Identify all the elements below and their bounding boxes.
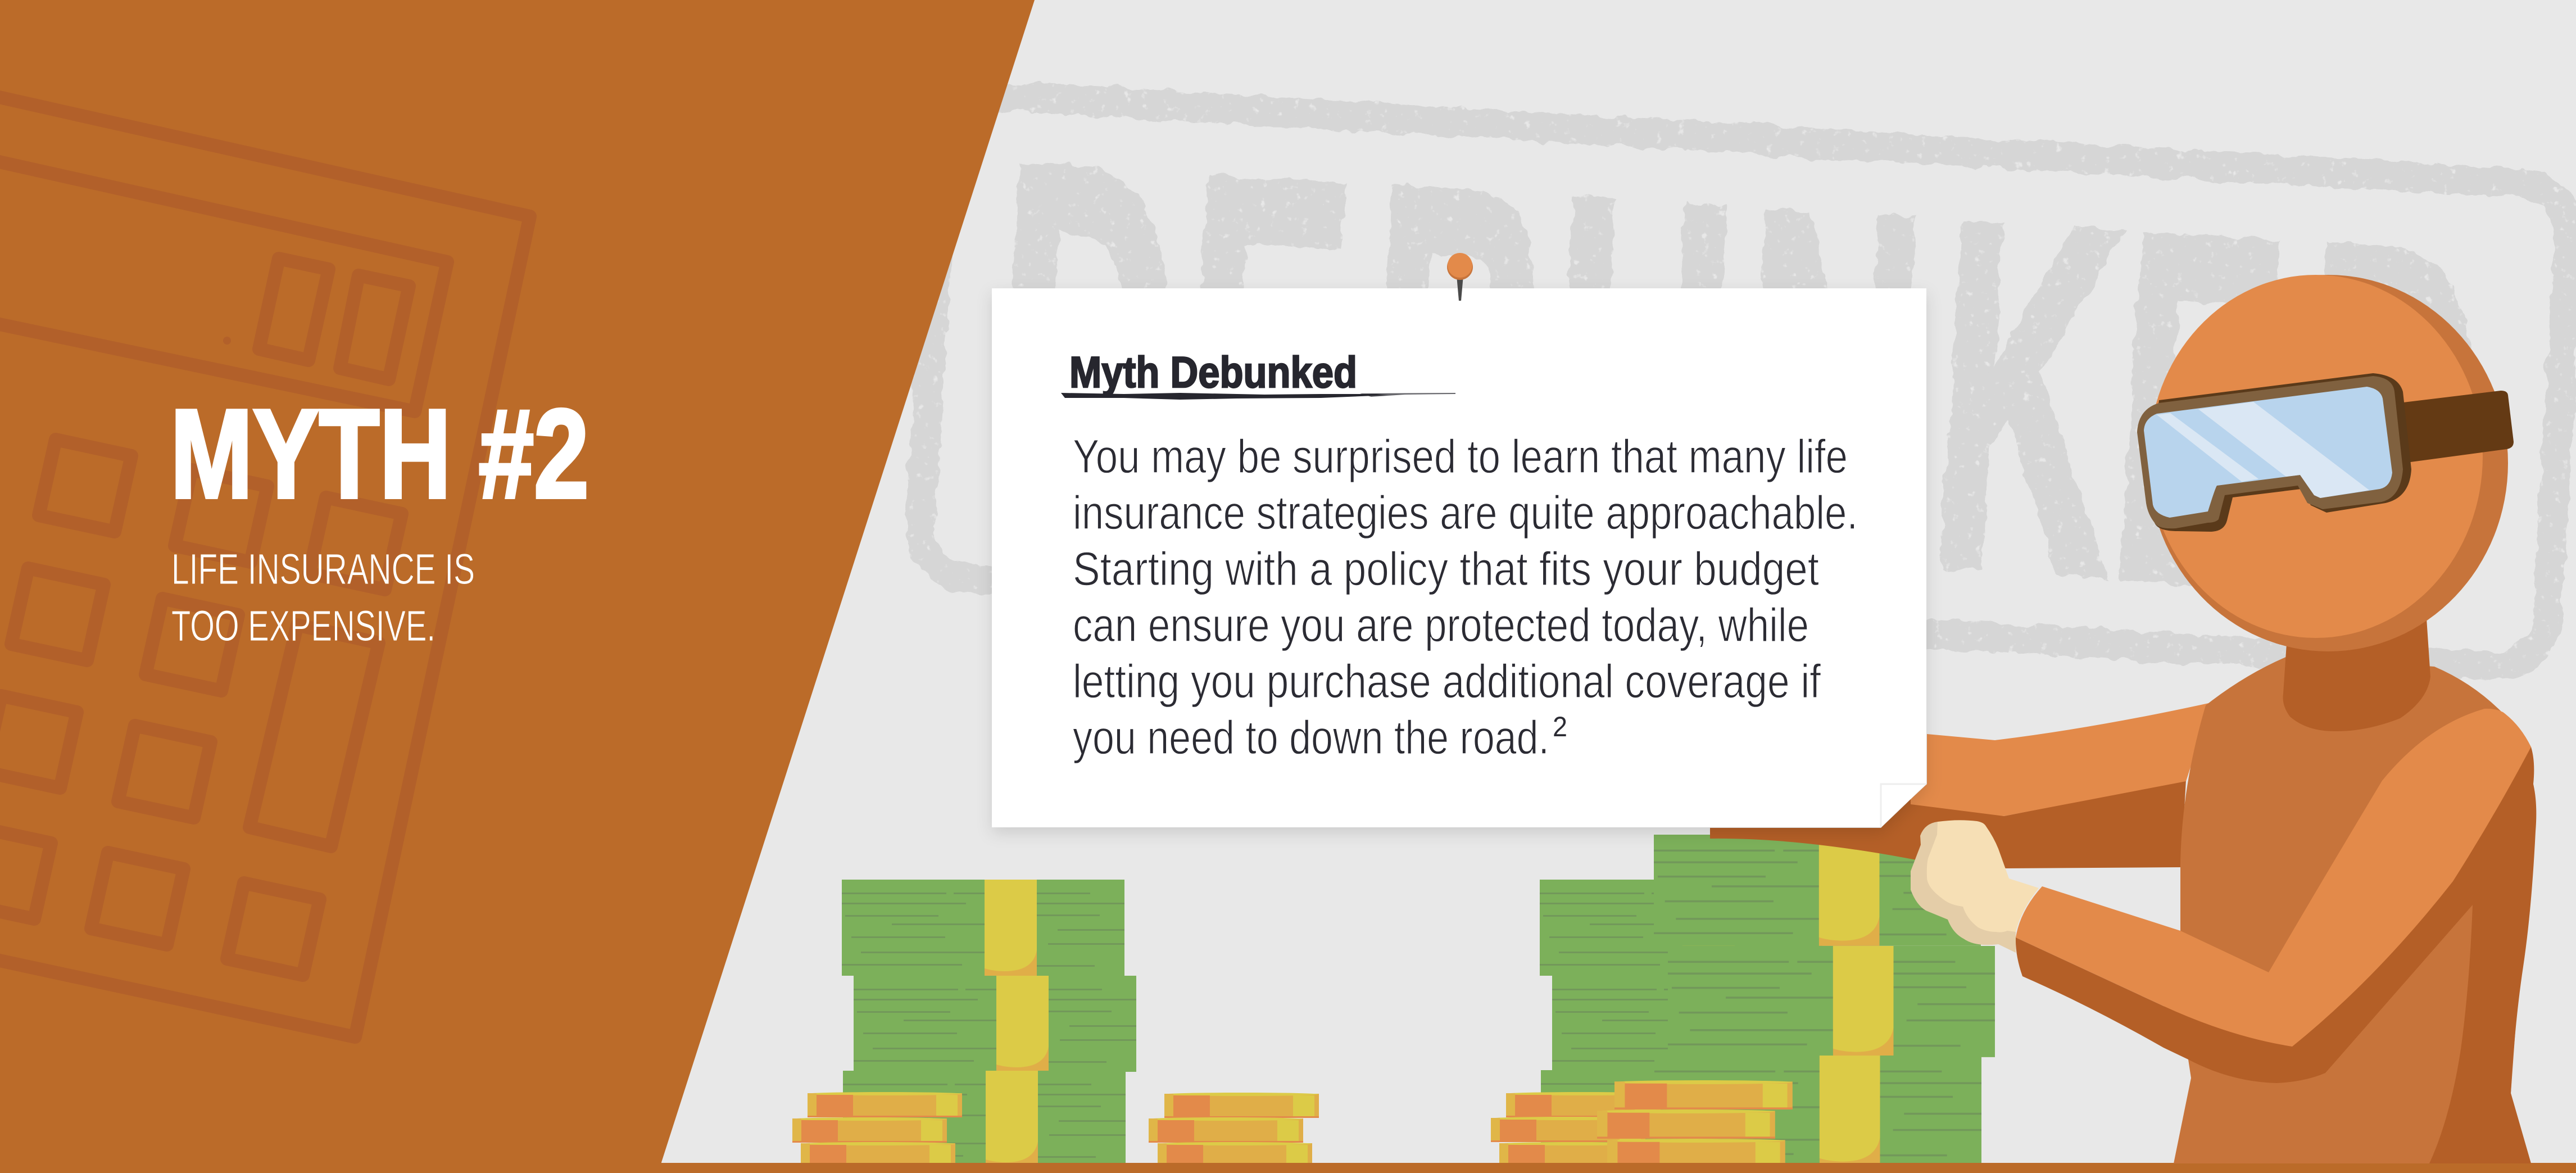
head shadow	[2148, 275, 2508, 651]
money stack: left	[842, 880, 1136, 1167]
panel: myth debunked card	[992, 288, 1926, 827]
body text: can ensure you are protected today, while	[1073, 599, 1809, 651]
goggle lens	[2144, 387, 2392, 518]
heading: myth number: MYTH #2	[170, 383, 589, 524]
body text: you need to down the road.	[1073, 711, 1549, 764]
text: myth statement: TOO EXPENSIVE.	[171, 602, 436, 650]
front arm	[2016, 709, 2531, 1047]
lens highlight small	[2157, 413, 2258, 482]
text: myth statement: LIFE INSURANCE IS	[171, 545, 475, 594]
body text: insurance strategies are quite approachable.	[1073, 486, 1858, 539]
icon: push pin	[1447, 253, 1473, 301]
card corner fold	[1881, 784, 1926, 827]
heading: myth debunked: Myth Debunked	[1069, 347, 1357, 397]
torso	[2174, 656, 2534, 1163]
floor	[661, 1163, 2576, 1173]
person: body	[1911, 275, 2536, 1163]
body text: letting you purchase additional coverage if	[1073, 655, 1821, 708]
body text	[1073, 430, 1858, 764]
coin stacks: right	[1491, 1080, 1793, 1168]
coin stack: middle	[1149, 1093, 1319, 1167]
body text: You may be surprised to learn that many life	[1073, 430, 1848, 483]
arm shadow side and clipboard edge	[1710, 780, 2186, 868]
hand shadow	[1911, 822, 2016, 953]
back shadow	[2164, 747, 2536, 1163]
stamp border	[917, 93, 2572, 669]
hand light	[1927, 820, 2039, 932]
goggle strap	[2394, 391, 2514, 463]
head	[2149, 275, 2483, 638]
neck	[2283, 618, 2430, 731]
goggles	[2137, 373, 2514, 532]
panel: orange myth panel	[0, 0, 1035, 1173]
text: myth statement	[171, 545, 475, 650]
body text: Starting with a policy that fits your budget	[1073, 542, 1819, 595]
front arm cuff shadow	[2016, 938, 2164, 1048]
stamp word: DEBUNKED	[979, 62, 2496, 699]
lens highlight	[2198, 402, 2369, 498]
icon: calculator watermark	[0, 96, 530, 1037]
goggle frame shadow	[2146, 373, 2411, 532]
body text: 2	[1553, 711, 1567, 742]
hand	[1911, 820, 2039, 953]
goggle frame	[2137, 376, 2403, 528]
brush underline	[1061, 393, 1455, 400]
person: back arm	[1710, 703, 2211, 868]
money stack: right	[1540, 835, 1995, 1167]
coin stack: left front	[792, 1092, 962, 1167]
arm lit side	[1911, 703, 2211, 816]
